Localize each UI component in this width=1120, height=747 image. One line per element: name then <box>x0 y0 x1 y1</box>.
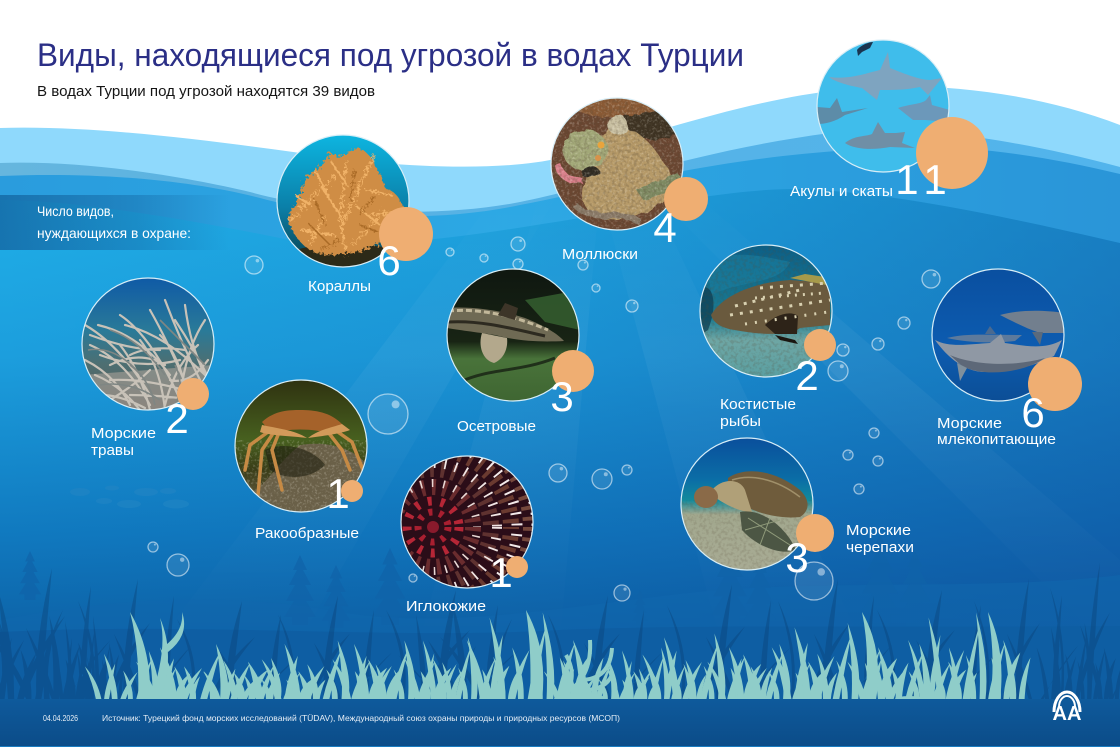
count badge <box>1028 357 1082 411</box>
bubbles <box>148 237 940 601</box>
label: Морские <box>937 415 1002 432</box>
photo: sturgeon <box>447 269 580 401</box>
bottom edge line <box>0 746 1120 747</box>
count badge <box>506 556 528 578</box>
label: черепахи <box>846 539 914 556</box>
fish school <box>70 486 189 508</box>
count badge <box>804 329 836 361</box>
legend: number of species needing protection <box>0 195 230 250</box>
seabed silhouettes <box>0 534 1120 700</box>
label: Костистые <box>720 396 796 413</box>
label: Морские <box>91 425 156 442</box>
label: рыбы <box>720 413 761 430</box>
species: marine mammals <box>932 269 1082 448</box>
count badge <box>664 177 708 221</box>
label <box>937 415 1056 448</box>
species: crustaceans <box>235 380 370 542</box>
title: Виды, находящиеся под угрозой в водах Турции <box>37 37 744 73</box>
label: Иглокожие <box>406 598 486 615</box>
label: Осетровые <box>457 418 536 435</box>
species: bony fish <box>700 245 836 430</box>
species: echinoderms <box>400 455 534 611</box>
light foreground seaweed <box>85 610 1031 708</box>
label <box>91 425 156 459</box>
footer source: Источник: Турецкий фонд морских исследований (TÜDAV), Международный союз охраны природы и природных ресурсов (МСОП) <box>102 713 620 723</box>
label <box>720 396 796 430</box>
photo: octopus <box>551 93 683 230</box>
icon: AA logo: AA <box>1052 703 1082 725</box>
species: molluscs <box>551 93 708 263</box>
legend: number of species needing protection: нуждающихся в охране: <box>37 225 191 241</box>
count: 6 <box>377 237 401 284</box>
footer date: 04.04.2026 <box>43 713 78 723</box>
photo: coral <box>277 135 409 272</box>
photo: turtle <box>681 438 813 570</box>
photo: grouper <box>700 245 832 377</box>
subtitle: В водах Турции под угрозой находятся 39 видов <box>37 83 375 100</box>
photo: dolphins <box>932 269 1070 401</box>
bottom band <box>0 699 1120 747</box>
label: травы <box>91 442 134 459</box>
count badge <box>177 378 209 410</box>
count: 4 <box>653 204 677 251</box>
photo: crab <box>235 380 370 515</box>
count badge <box>916 117 988 189</box>
species: sea turtles <box>681 438 914 581</box>
species: seagrasses <box>82 278 214 459</box>
species: sharks and rays <box>790 40 988 203</box>
photo: sharks <box>817 40 950 172</box>
icon: AA logo <box>1052 692 1082 725</box>
count: 3 <box>550 373 574 420</box>
count badge <box>341 480 363 502</box>
count: 11 <box>895 156 955 203</box>
label: Морские <box>846 522 911 539</box>
label: Моллюски <box>562 246 638 263</box>
label: млекопитающие <box>937 431 1056 448</box>
dark background seaweed <box>0 562 1120 700</box>
legend: number of species needing protection: Число видов, <box>37 203 114 219</box>
count badge <box>379 207 433 261</box>
species: sturgeons <box>447 269 594 435</box>
count: 1 <box>326 470 350 517</box>
photo: sea urchin <box>402 456 532 588</box>
label <box>846 522 914 556</box>
species: corals <box>277 135 433 295</box>
count badge <box>796 514 834 552</box>
count: 2 <box>165 395 189 442</box>
count: 6 <box>1021 389 1045 436</box>
label: Кораллы <box>308 278 371 295</box>
label: Ракообразные <box>255 525 359 542</box>
count badge <box>552 350 594 392</box>
photo: seagrass <box>82 278 214 410</box>
label: Акулы и скаты <box>790 183 893 200</box>
light rays <box>160 190 1120 660</box>
count: 1 <box>489 549 513 596</box>
count: 3 <box>785 534 809 581</box>
count: 2 <box>795 352 819 399</box>
